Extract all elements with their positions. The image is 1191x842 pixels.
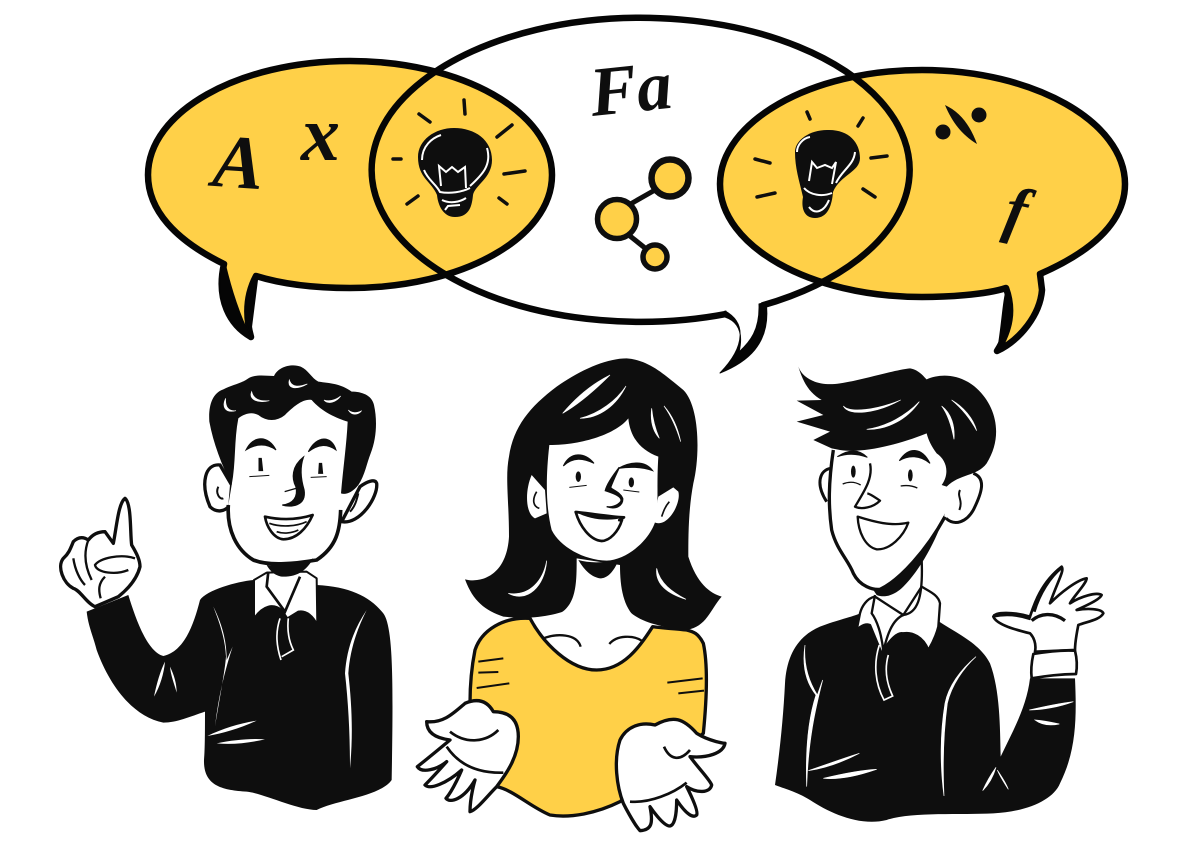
speech bubbles: overlapping venn <box>148 18 1125 373</box>
right hand <box>616 719 725 831</box>
neck <box>530 558 653 670</box>
nose <box>605 467 623 508</box>
neck shadow <box>578 558 619 578</box>
sweater highlights <box>804 645 1073 796</box>
eyes <box>569 485 639 492</box>
icon: right light bulb <box>755 112 887 218</box>
hair highlights <box>843 400 977 439</box>
right bubble <box>720 70 1125 351</box>
mouth <box>858 517 908 549</box>
nose <box>282 457 304 506</box>
eyebrows <box>837 450 930 463</box>
icon: left light bulb <box>393 100 525 217</box>
ears <box>205 465 377 522</box>
collarbones and shirt creases <box>543 635 642 647</box>
middle bubble tail <box>720 302 767 373</box>
placket <box>876 645 893 700</box>
hair <box>797 367 996 487</box>
ears <box>527 475 679 523</box>
collar <box>857 587 940 653</box>
letters Fa: Fa <box>585 47 675 132</box>
nose <box>855 463 880 508</box>
mouth <box>265 515 313 539</box>
icon: network nodes <box>598 160 688 269</box>
hair highlights <box>508 375 686 599</box>
person: woman in yellow top <box>417 358 725 831</box>
neck shadow <box>267 558 313 577</box>
letter A: A <box>206 119 267 206</box>
sweater <box>775 613 1076 822</box>
top <box>470 618 706 816</box>
letter f: f <box>999 173 1040 248</box>
face <box>547 418 658 561</box>
person: left man pointing up <box>61 365 392 810</box>
neck shadow <box>873 513 945 596</box>
hand <box>993 567 1103 652</box>
face <box>228 417 347 564</box>
sweater <box>87 580 392 810</box>
hand <box>61 498 140 607</box>
hair highlights <box>224 380 362 414</box>
sweater highlights <box>154 607 367 768</box>
eyes <box>249 458 327 477</box>
cuff <box>1031 651 1077 678</box>
shirt creases <box>477 658 704 693</box>
person: right man waving <box>775 367 1103 822</box>
left bubble <box>148 61 552 337</box>
eyebrows <box>563 455 653 471</box>
face <box>829 433 947 589</box>
rays <box>755 112 887 197</box>
placket <box>277 618 293 660</box>
hair <box>209 365 376 494</box>
mouth <box>576 512 624 541</box>
icon: percent-like symbol <box>936 105 986 144</box>
middle bubble outline <box>372 18 910 322</box>
hair <box>465 358 722 630</box>
middle bubble fill <box>371 18 909 322</box>
eyebrows <box>246 439 336 452</box>
eyes <box>851 466 856 478</box>
left hand <box>417 701 518 812</box>
collar <box>254 572 317 625</box>
ears <box>820 468 982 522</box>
letter x: x <box>300 90 340 177</box>
rays <box>393 100 525 204</box>
